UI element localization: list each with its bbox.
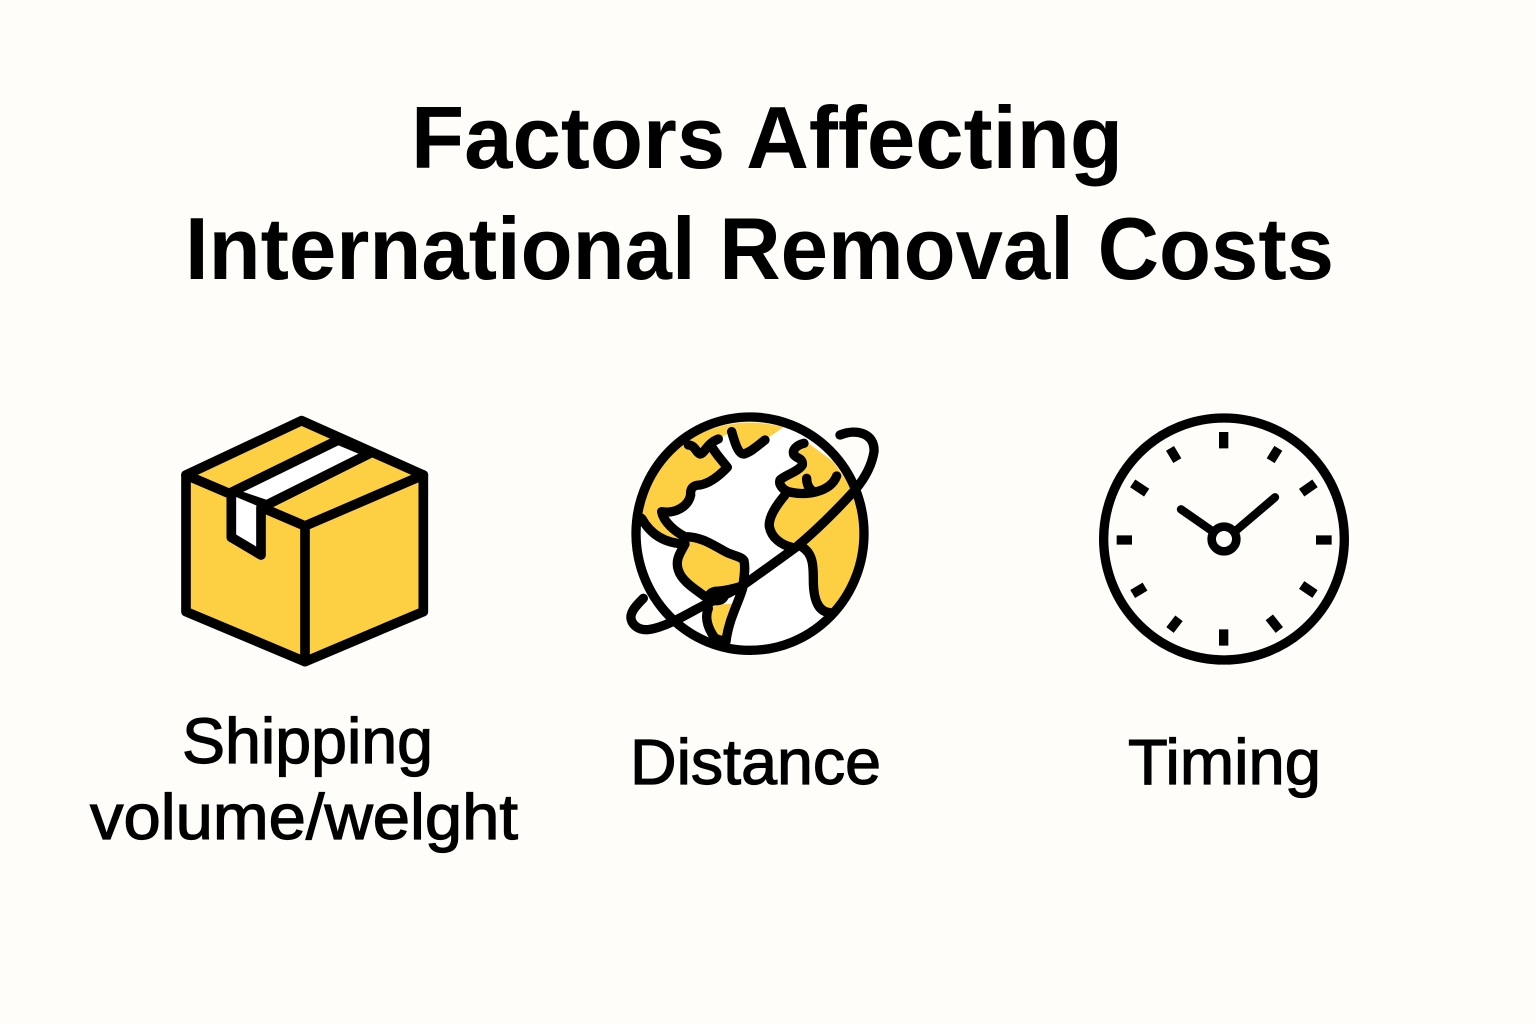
icon: clock [1104, 418, 1344, 660]
label: timing: Timing [1128, 726, 1321, 798]
title: Factors Affecting [411, 88, 1123, 187]
icon: cardboard box [186, 421, 423, 662]
label: shipping volume/weight: Shipping [182, 705, 433, 777]
title [185, 88, 1334, 298]
label: shipping volume/weight: volume/welght [90, 781, 518, 853]
panel: shipping volume/weight [90, 421, 518, 853]
label: shipping volume/weight [90, 705, 518, 853]
panel: distance [630, 417, 881, 798]
label: distance: Distance [630, 726, 881, 798]
title: International Removal Costs [185, 199, 1334, 298]
icon: globe with orbit [631, 417, 874, 650]
panel: timing [1104, 418, 1344, 798]
